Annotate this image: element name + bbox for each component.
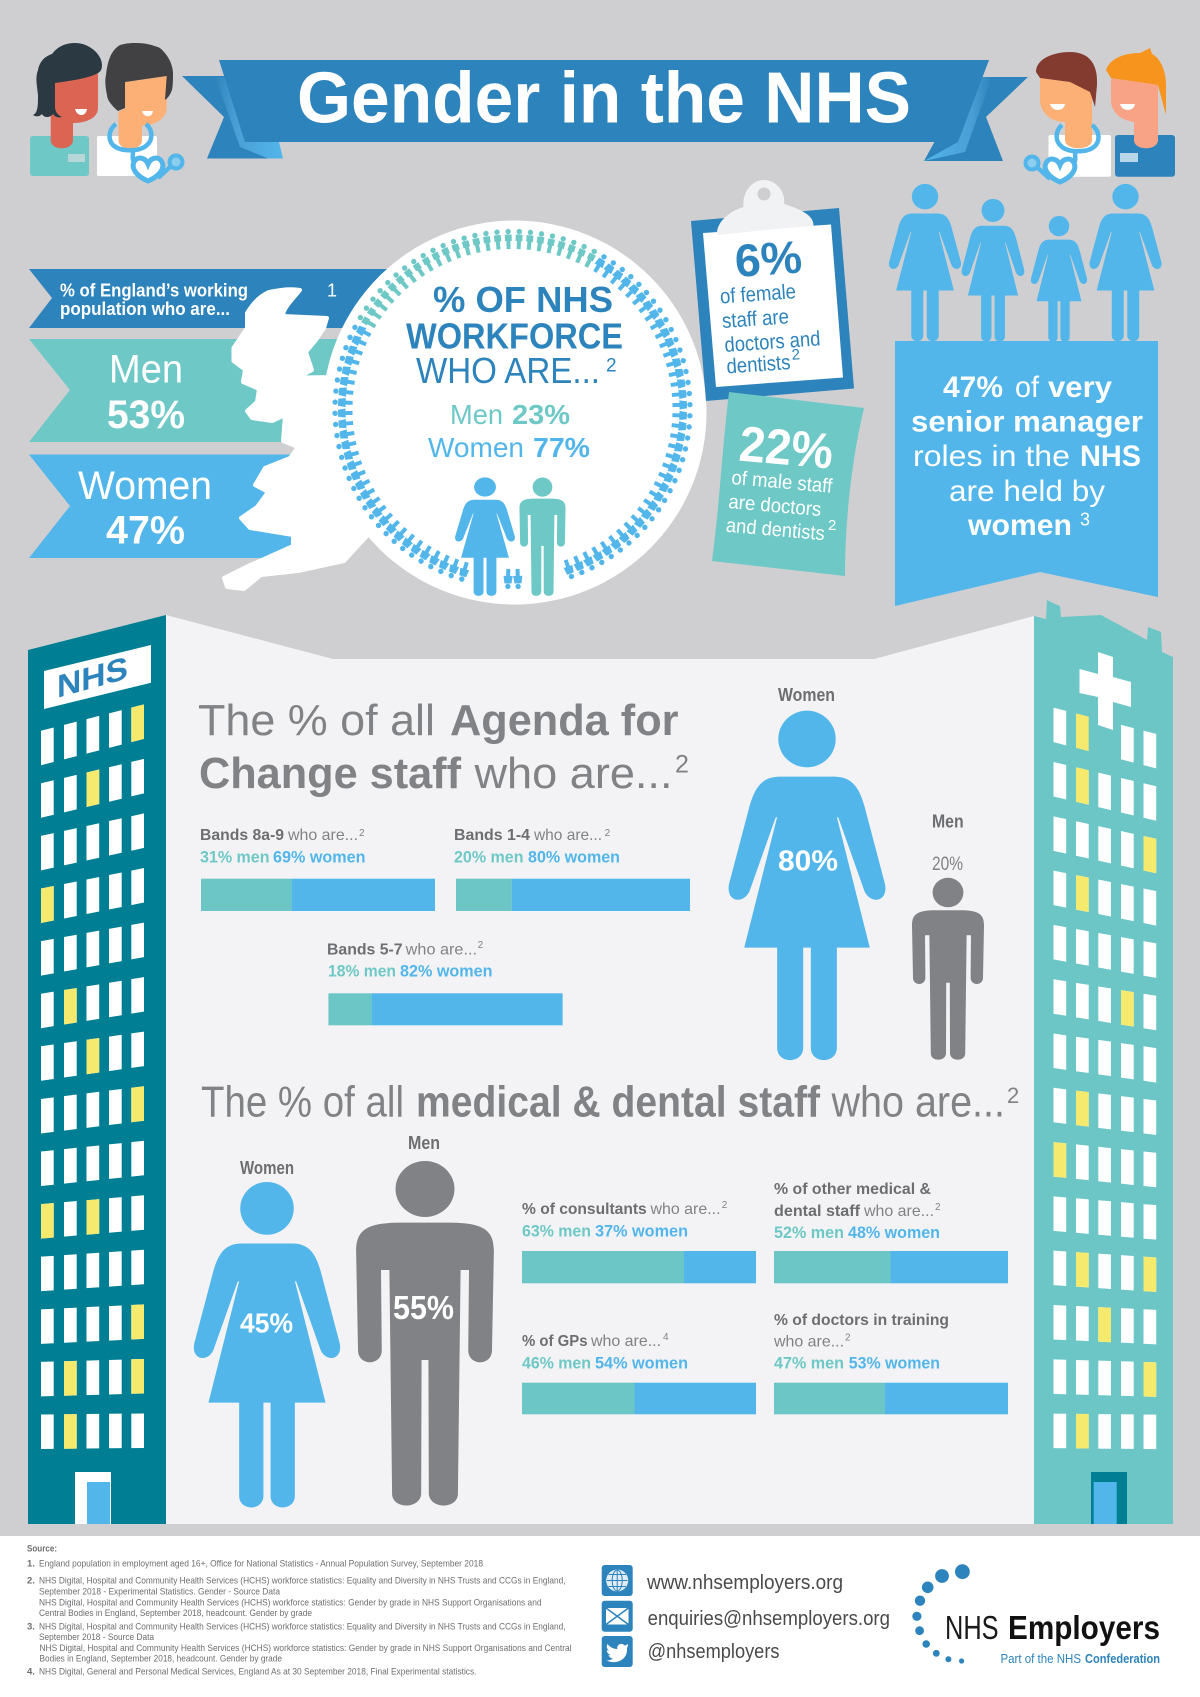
stat: Bands 1-4: 2	[605, 828, 611, 839]
stat: Bands 1-4: 80% women	[528, 848, 620, 867]
stat: GPs: 54% women	[595, 1354, 688, 1373]
panel: senior manager banner: women	[967, 509, 1072, 542]
heading: Agenda for Change: who are...	[473, 749, 672, 798]
logo: NHS Employers: Employers	[1008, 1609, 1160, 1646]
workforce heading: 2	[606, 356, 617, 376]
stat: other medical and dental staff: 48% women	[848, 1223, 940, 1242]
figure: women 45%: Women	[240, 1158, 294, 1178]
bar	[456, 879, 690, 911]
text block: sources: 1.	[27, 1559, 35, 1570]
banner: men 53%: 53%	[107, 393, 185, 437]
ring of small female figures	[332, 252, 693, 589]
map: UK silhouette	[224, 289, 400, 589]
banner: men 53%	[29, 339, 345, 442]
title banner	[182, 58, 1028, 161]
text block: sources: 2.	[27, 1575, 35, 1586]
panel: clipboard 6%: 2	[791, 346, 801, 364]
icon: hospital cross	[1080, 652, 1131, 730]
bar	[328, 993, 563, 1025]
logo: NHS Employers	[912, 1564, 1160, 1666]
heading: medical and dental staff: medical & dental staff	[416, 1078, 820, 1127]
title: Gender in the NHS	[297, 58, 911, 138]
text block: sources: Bodies in England, September 2018, headcount. Gender by grade	[40, 1654, 282, 1665]
stat: other medical and dental staff	[774, 1181, 1008, 1283]
panel: senior manager banner: are held by	[949, 475, 1105, 508]
bar	[201, 879, 435, 911]
contact: twitter: @nhsemployers	[648, 1641, 780, 1663]
panel: senior manager banner: 47%	[943, 371, 1003, 404]
workforce heading: WORKFORCE	[406, 316, 623, 357]
contact: website	[602, 1565, 843, 1596]
windows right	[1054, 708, 1156, 1449]
heading: Agenda for Change: Agenda for	[450, 696, 678, 745]
stat: doctors in training: 47% men	[774, 1354, 844, 1373]
figure: women 80%: 80%	[778, 846, 838, 878]
stat: consultants: 63% men	[522, 1222, 591, 1241]
stat: Bands 5-7	[327, 940, 563, 1025]
banner: England working population heading: population who are...	[60, 299, 230, 319]
stat: GPs: 4	[663, 1332, 669, 1343]
stat: Bands 8a-9: who are...	[287, 827, 358, 844]
panel: senior manager banner: very	[1048, 371, 1112, 404]
icon: two female staff left	[30, 43, 184, 181]
panel: clipboard 6%: dentists	[726, 351, 791, 378]
panel: note 22%: are doctors	[728, 491, 822, 521]
men and women percentages	[428, 399, 590, 463]
men and women percentages: Women	[428, 432, 524, 463]
stat: Bands 1-4: who are...	[533, 827, 602, 844]
heading: Agenda for Change	[198, 696, 689, 798]
stat: Bands 5-7: 18% men	[328, 962, 396, 981]
text block: sources	[27, 1544, 572, 1677]
panel: note 22%	[712, 392, 864, 576]
figure: women 80%	[729, 685, 885, 1060]
contact: email	[602, 1601, 890, 1632]
banner: England working population heading	[29, 269, 390, 328]
stat: Bands 5-7: 2	[478, 940, 484, 951]
banner: women 47%: 47%	[106, 508, 185, 552]
heading: Agenda for Change: The % of all	[198, 696, 435, 745]
stat: Bands 1-4: 20% men	[454, 848, 524, 867]
workforce heading: WHO ARE...	[416, 350, 600, 391]
men and women percentages: 77%	[533, 432, 590, 463]
bar	[774, 1383, 1008, 1414]
workforce heading	[406, 279, 623, 391]
footer background	[0, 1536, 1200, 1697]
sign: NHS: NHS	[57, 649, 128, 705]
sign: NHS	[44, 645, 151, 709]
panel: note 22%: of male staff	[731, 467, 834, 498]
text block: sources: NHS Digital, General and Personal Medical Services, England As at 30 September 2018, Final Experimental statistics.	[39, 1666, 476, 1677]
panel: senior manager banner: roles in the	[913, 440, 1070, 473]
heading: Agenda for Change: Change staff	[199, 749, 461, 798]
stat: other medical and dental staff: 2	[935, 1202, 941, 1213]
door left	[75, 1472, 111, 1524]
heading: medical and dental staff	[201, 1078, 1019, 1127]
banner: England working population heading: % of England’s working	[60, 280, 248, 300]
door right	[1091, 1472, 1127, 1524]
workforce heading: % OF NHS	[433, 279, 613, 320]
text block: sources: September 2018 - Source Data	[39, 1632, 155, 1643]
text block: sources: NHS Digital, Hospital and Community Health Services (HCHS) workforce statistics: Gender by grade in NHS Support Organisations and Central	[40, 1643, 572, 1654]
figure: men 20%: Men	[932, 812, 964, 832]
figure: women 45%	[194, 1158, 340, 1507]
panel: senior manager banner: senior manager	[911, 406, 1143, 439]
stat: consultants: 37% women	[595, 1222, 688, 1241]
stat: Bands 8a-9	[200, 827, 435, 911]
stat: GPs: who are...	[590, 1333, 661, 1350]
stat: Bands 1-4	[454, 827, 690, 911]
figure: men 55%: 55%	[393, 1289, 454, 1326]
stat: consultants: % of consultants	[522, 1201, 647, 1218]
text block: sources: September 2018 - Experimental Statistics. Gender - Source Data	[39, 1586, 281, 1597]
building: NHS left	[28, 615, 166, 1524]
figure: men 55%	[356, 1133, 494, 1506]
banner: England working population heading: 1	[327, 280, 337, 300]
heading: medical and dental staff: The % of all	[201, 1078, 404, 1127]
stat: consultants: who are...	[650, 1201, 720, 1218]
text block: sources: Central Bodies in England, September 2018, headcount. Gender by grade	[39, 1608, 312, 1619]
panel: senior manager banner: 3	[1080, 510, 1090, 530]
stat: Bands 5-7: Bands 5-7	[327, 941, 403, 958]
men and women percentages: 23%	[512, 399, 570, 430]
text block: sources: 3.	[27, 1621, 35, 1632]
stat: GPs: % of GPs	[522, 1333, 588, 1350]
icon: woman and man	[455, 477, 566, 596]
windows left	[41, 704, 144, 1449]
stat: Bands 8a-9: 2	[359, 828, 365, 839]
contact: email: enquiries@nhsemployers.org	[648, 1608, 890, 1630]
text block: sources: NHS Digital, Hospital and Community Health Services (HCHS) workforce statistics: Gender by grade in NHS Support Organisations and	[39, 1597, 542, 1608]
stat: doctors in training: who are...	[773, 1334, 844, 1351]
stat: other medical and dental staff: dental staff	[774, 1203, 861, 1220]
heading: medical and dental staff: who are...	[831, 1078, 1005, 1127]
text block: sources: NHS Digital, Hospital and Community Health Services (HCHS) workforce statistics: Equality and Diversity in NHS Trusts and CCGs in England,	[39, 1621, 566, 1632]
contact: twitter	[602, 1636, 780, 1667]
logo: NHS Employers: NHS	[945, 1609, 999, 1646]
panel: senior manager banner: NHS	[1080, 440, 1141, 473]
figure: women 45%: 45%	[240, 1308, 293, 1339]
panel: central wall	[166, 615, 1034, 1524]
stat: Bands 8a-9: 31% men	[200, 848, 270, 867]
heading: medical and dental staff: 2	[1007, 1083, 1019, 1108]
stat: other medical and dental staff: 52% men	[774, 1223, 844, 1242]
stat: Bands 8a-9: Bands 8a-9	[200, 827, 284, 844]
panel: clipboard 6%: staff are	[721, 305, 790, 333]
banner: women 47%: Women	[78, 464, 212, 508]
stat: consultants: 2	[722, 1200, 728, 1211]
bar	[522, 1383, 756, 1414]
stat: Bands 5-7: 82% women	[400, 962, 492, 981]
banner: men 53%: Men	[109, 348, 183, 392]
stat: doctors in training	[773, 1312, 1008, 1414]
stat: other medical and dental staff: who are...	[863, 1203, 934, 1220]
panel: note 22%: 2	[828, 517, 836, 534]
panel: clipboard 6%	[691, 180, 854, 401]
text block: sources: 4.	[27, 1666, 35, 1677]
stat: consultants	[522, 1200, 756, 1283]
figure: men 20%: 20%	[932, 854, 963, 875]
stat: doctors in training: % of doctors in training	[774, 1312, 949, 1329]
stat: doctors in training: 53% women	[849, 1354, 940, 1373]
building: hospital right	[1034, 600, 1173, 1524]
panel: note 22%: and dentists	[725, 515, 826, 545]
text block: sources: Source:	[27, 1544, 57, 1555]
text block: sources: England population in employment aged 16+, Office for National Statistics - Annual Population Survey, September 2018	[39, 1559, 483, 1570]
banner: women 47%	[29, 454, 310, 558]
panel: clipboard 6%: doctors and	[724, 327, 821, 357]
panel: clipboard 6%: 6%	[733, 230, 804, 287]
panel: note 22%: 22%	[737, 416, 836, 480]
stat: GPs: 46% men	[522, 1354, 591, 1373]
icon: two male staff right	[1024, 48, 1175, 182]
stat: doctors in training: 2	[845, 1332, 851, 1344]
contact: website: www.nhsemployers.org	[646, 1572, 843, 1594]
icon: clip	[717, 180, 814, 235]
men and women percentages: Men	[450, 399, 503, 430]
stat: Bands 1-4: Bands 1-4	[454, 827, 530, 844]
logo: NHS Employers: Confederation	[1085, 1651, 1160, 1666]
stat: Bands 5-7: who are...	[405, 941, 477, 958]
logo: NHS Employers: Part of the NHS	[1000, 1651, 1081, 1666]
stat: other medical and dental staff: % of other medical &	[774, 1181, 931, 1198]
figure: women 80%: Women	[778, 685, 835, 705]
panel: clipboard 6%: of female	[719, 280, 797, 308]
stat: GPs	[522, 1332, 756, 1414]
panel: senior manager banner: of	[1015, 371, 1040, 404]
bar	[774, 1251, 1008, 1283]
icon: four women on banner	[889, 184, 1162, 342]
figure: men 55%: Men	[408, 1133, 440, 1153]
panel: NHS workforce circle	[322, 220, 706, 604]
heading: Agenda for Change: 2	[675, 751, 689, 779]
text block: sources: NHS Digital, Hospital and Community Health Services (HCHS) workforce statistics: Equality and Diversity in NHS Trusts and CCGs in England,	[39, 1575, 566, 1586]
bar	[522, 1251, 756, 1283]
stat: Bands 8a-9: 69% women	[273, 848, 366, 867]
panel: senior manager banner	[895, 341, 1158, 606]
ring of small male figures	[356, 229, 598, 330]
figure: men 20%	[912, 812, 984, 1060]
